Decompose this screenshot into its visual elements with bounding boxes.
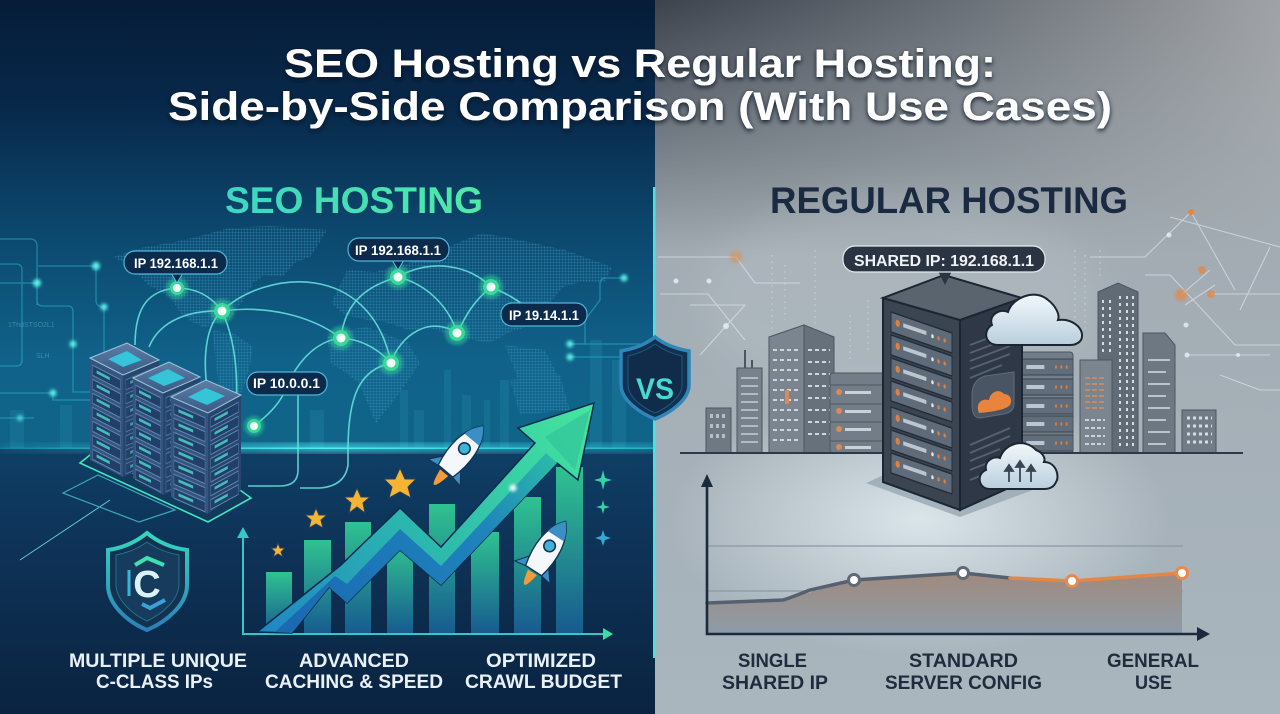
chart nodes xyxy=(848,568,1188,586)
icon: VS shield: VS xyxy=(636,373,674,406)
growth arrow xyxy=(257,403,594,633)
labels: SEO benefits: CACHING & SPEED xyxy=(265,672,443,693)
city skyline xyxy=(680,283,1243,453)
center divider xyxy=(653,187,656,658)
rack two xyxy=(133,362,200,495)
labels: regular hosting traits: SERVER CONFIG xyxy=(885,673,1042,694)
icon: orange cloud xyxy=(972,372,1014,418)
labels: SEO benefits: MULTIPLE UNIQUE xyxy=(69,651,247,672)
icon: VS shield xyxy=(621,337,689,419)
callout: shared IP xyxy=(843,246,1045,285)
chart axes xyxy=(237,527,613,640)
icon: C-class shield xyxy=(108,533,187,630)
heading: SEO hosting: SEO HOSTING xyxy=(225,180,483,221)
building tall left xyxy=(769,325,834,453)
icon: rating stars xyxy=(271,468,416,557)
chart line xyxy=(707,573,1182,603)
labels: regular hosting traits: USE xyxy=(1135,673,1172,694)
chart bars xyxy=(266,467,583,634)
title xyxy=(168,42,1112,129)
bar chart: SEO growth xyxy=(237,403,613,640)
labels: regular hosting traits: SINGLE xyxy=(738,651,807,672)
labels: regular hosting traits: STANDARD xyxy=(909,651,1018,672)
network nodes xyxy=(166,265,503,436)
building small right xyxy=(1182,410,1216,453)
server racks xyxy=(63,343,251,522)
panel: regular hosting xyxy=(655,0,1280,714)
building small left xyxy=(706,408,731,453)
callout: IP 192.168.1.1 north: IP 192.168.1.1 xyxy=(355,243,441,258)
building tallest xyxy=(1098,283,1138,453)
rack one xyxy=(90,343,159,477)
labels: SEO benefits: C-CLASS IPs xyxy=(96,672,213,693)
panel: SEO hosting: 1ThdSTSO2L1 xyxy=(8,322,55,329)
callout: IP 192.168.1.1 north xyxy=(348,238,449,270)
building slim xyxy=(737,350,762,453)
title: Side-by-Side Comparison (With Use Cases) xyxy=(168,85,1112,129)
rack three xyxy=(171,380,241,514)
icon: sparkles xyxy=(594,470,612,546)
building right xyxy=(1143,333,1175,453)
callout: IP 19.14.1.1: IP 19.14.1.1 xyxy=(509,308,579,323)
labels: SEO benefits: ADVANCED xyxy=(299,651,409,672)
chart area xyxy=(707,573,1182,634)
icon: cloud upper xyxy=(986,295,1082,345)
callout: IP 192.168.1.1 west: IP 192.168.1.1 xyxy=(134,256,218,271)
callout: IP 10.0.0.1 xyxy=(247,372,327,395)
icon: rocket upper xyxy=(418,413,499,498)
network arcs xyxy=(20,266,530,560)
panel: SEO hosting xyxy=(0,0,656,714)
big server tower xyxy=(866,275,1060,517)
server units xyxy=(891,312,952,494)
callout: IP 10.0.0.1: IP 10.0.0.1 xyxy=(253,376,320,391)
callout: IP 192.168.1.1 west xyxy=(124,251,227,283)
title: SEO Hosting vs Regular Hosting: xyxy=(284,42,996,86)
building mid right xyxy=(1080,360,1112,453)
labels: SEO benefits xyxy=(69,651,622,693)
labels: regular hosting traits: SHARED IP xyxy=(722,673,828,694)
panel: SEO hosting: SLH xyxy=(36,353,50,360)
line chart: regular performance xyxy=(701,474,1210,641)
labels: SEO benefits: CRAWL BUDGET xyxy=(465,672,622,693)
heading: regular hosting: REGULAR HOSTING xyxy=(770,180,1128,221)
callout: shared IP: SHARED IP: 192.168.1.1 xyxy=(854,253,1034,270)
labels: SEO benefits: OPTIMIZED xyxy=(486,651,596,672)
labels: regular hosting traits: GENERAL xyxy=(1107,651,1199,672)
icon: cloud upload xyxy=(980,443,1058,489)
icon: rocket lower xyxy=(507,510,583,596)
world map xyxy=(114,226,612,423)
server block right xyxy=(1020,352,1073,453)
chart axes xyxy=(701,474,1210,641)
server block left xyxy=(830,373,886,453)
labels: regular hosting traits xyxy=(722,651,1199,694)
callout: IP 19.14.1.1 xyxy=(501,303,587,326)
icon: C-class shield: C xyxy=(133,564,161,606)
